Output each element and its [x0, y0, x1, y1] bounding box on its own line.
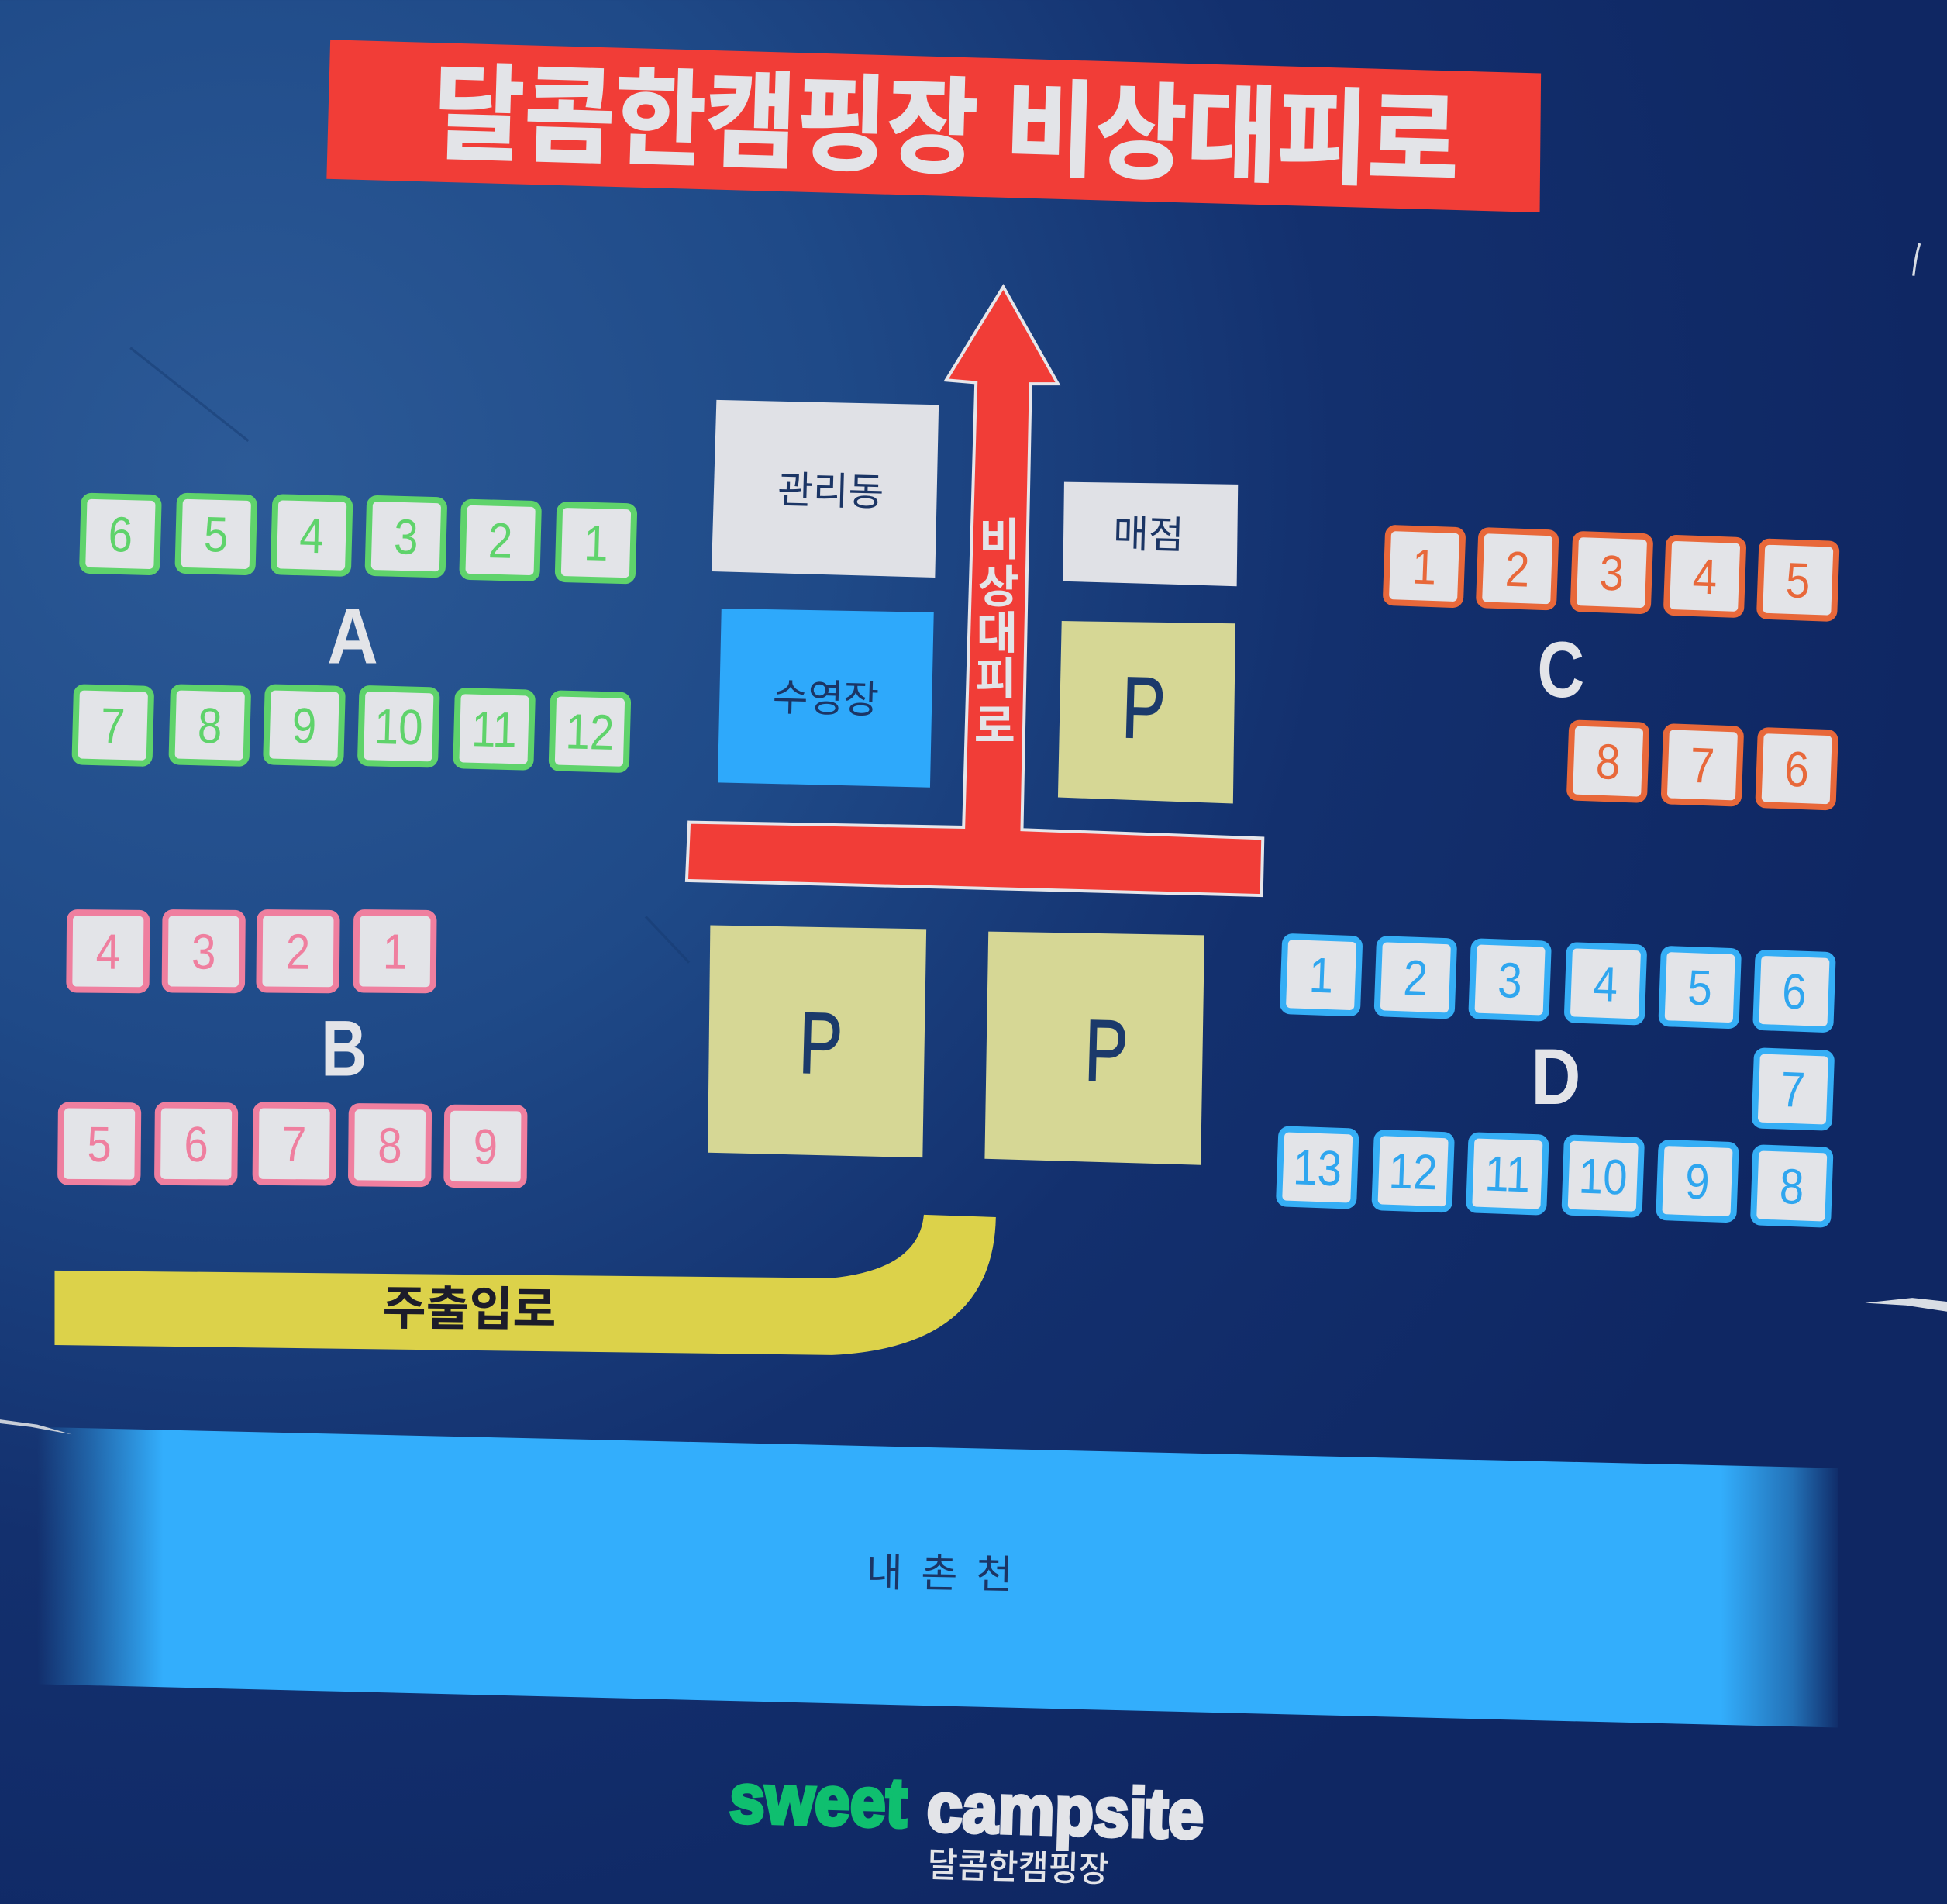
parking lower right [984, 932, 1204, 1165]
parking upper right: P [1121, 658, 1166, 757]
zone C: 3 [1599, 544, 1625, 601]
zone A: 9 [291, 697, 317, 754]
zone A: 2 [488, 512, 513, 569]
zone B [60, 912, 524, 1185]
zone D: 4 [1593, 955, 1618, 1012]
zone C: 2 [1504, 540, 1531, 598]
zone A [74, 496, 634, 770]
zone D: 7 [1780, 1061, 1806, 1118]
zone A: 8 [197, 697, 222, 754]
zone A: 4 [298, 507, 325, 564]
zone D: 2 [1402, 949, 1428, 1006]
evacuation route arrow [687, 287, 1263, 895]
zone A: 5 [203, 506, 229, 563]
evacuation route arrow: 비 [979, 516, 1020, 565]
zone B: 6 [184, 1116, 208, 1172]
building: shop [1063, 482, 1238, 586]
zone D: 12 [1388, 1143, 1439, 1200]
title banner: 달콤한캠핑장 비상대피로 [432, 55, 1460, 201]
logo [729, 1760, 1204, 1889]
zone D: 1 [1308, 947, 1334, 1003]
zone B: 1 [382, 923, 407, 980]
zone B: 3 [191, 923, 216, 980]
evacuation route arrow: 피 [975, 655, 1016, 705]
zone C: 5 [1785, 552, 1811, 609]
logo: 달콤한캠핑장 [927, 1845, 1109, 1889]
zone D: 11 [1484, 1145, 1531, 1202]
main entrance road: 주출입로 [382, 1281, 557, 1337]
parking lower left [708, 926, 926, 1157]
zone D: 5 [1687, 959, 1713, 1016]
zone C [1386, 528, 1836, 807]
building: swimming pool [718, 609, 934, 788]
zone C: 1 [1411, 538, 1437, 595]
zone C: 8 [1595, 733, 1621, 790]
zone A: 3 [393, 509, 419, 565]
zone B: 9 [473, 1119, 498, 1174]
zone A: 1 [583, 515, 609, 571]
zone B: 2 [285, 923, 310, 980]
zone B: 7 [282, 1116, 307, 1172]
evacuation route arrow: 로 [974, 702, 1015, 751]
parking lower left: P [798, 993, 844, 1092]
zone C: 7 [1689, 736, 1715, 794]
zone A: A [327, 592, 378, 681]
zone A: 12 [565, 703, 615, 761]
zone C: 4 [1692, 548, 1718, 605]
zone A: 6 [108, 506, 133, 563]
logo: sweet [729, 1760, 908, 1843]
zone C: C [1537, 625, 1584, 714]
river: 내 촌 천 [866, 1550, 1017, 1597]
zone A: 10 [374, 698, 424, 755]
parking lower right: P [1084, 1001, 1129, 1100]
building: office [712, 400, 939, 578]
zone B: 8 [377, 1117, 402, 1173]
building: office: 관리동 [777, 468, 884, 514]
zone D [1279, 936, 1833, 1225]
evacuation route arrow: 대 [977, 609, 1018, 658]
building: swimming pool: 수영장 [772, 675, 880, 722]
zone D: 8 [1779, 1157, 1805, 1215]
zone D: 13 [1292, 1139, 1342, 1196]
zone A: 7 [100, 697, 126, 754]
zone D: D [1531, 1032, 1580, 1121]
parking upper right [1058, 621, 1235, 804]
evacuation route arrow: 상 [978, 563, 1019, 612]
zone D: 9 [1684, 1153, 1711, 1209]
main entrance road [54, 1215, 996, 1355]
zone A: 11 [470, 701, 518, 757]
zone D: 3 [1497, 952, 1523, 1009]
zone C: 6 [1783, 740, 1810, 797]
building: shop: 매점 [1112, 512, 1184, 557]
zone B: B [321, 1003, 367, 1092]
logo: campsite [926, 1768, 1204, 1854]
zone B: 5 [87, 1116, 112, 1172]
zone B: 4 [95, 923, 120, 980]
river [37, 1427, 1838, 1727]
zone D: 10 [1578, 1147, 1628, 1205]
zone D: 6 [1781, 963, 1807, 1019]
